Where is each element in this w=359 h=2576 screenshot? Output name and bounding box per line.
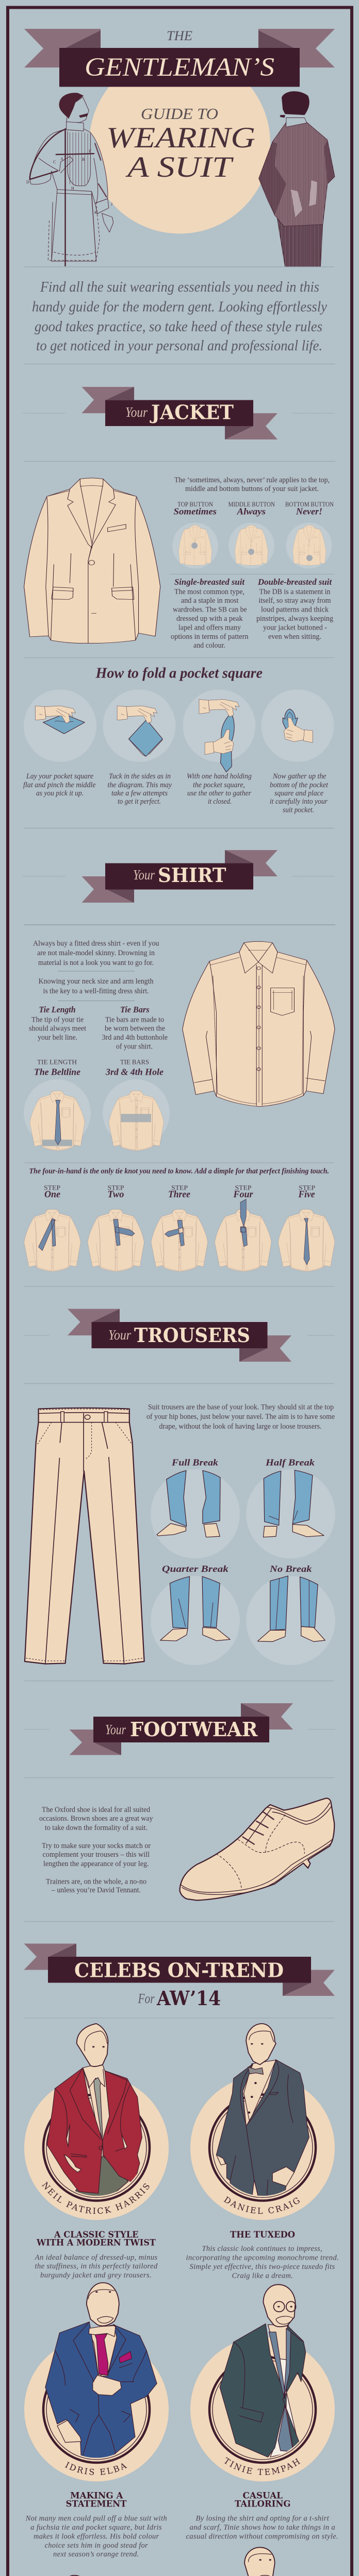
divider: [58, 1001, 135, 1002]
section ribbon: jacket: [23, 387, 334, 439]
button rule labels: Never!: [296, 506, 322, 516]
section ribbon: jacket: Your: [125, 404, 148, 420]
jacket illustration: [24, 478, 160, 643]
footwear text: [39, 1806, 153, 1894]
divider: [24, 1383, 334, 1384]
section ribbon: celebs: [24, 1943, 335, 1996]
celeb text: tuxedo: THE TUXEDO: [230, 2230, 295, 2240]
divider: [24, 827, 334, 828]
shirt intro text: are not male-model skinny. Drowning in: [37, 949, 155, 957]
celeb text: making a statement: makes it look effortless. His bold colour: [34, 2533, 159, 2541]
engraving: man from behind: [259, 91, 335, 267]
shirt intro text: [33, 940, 159, 967]
single-breasted text: The most common type,: [174, 588, 244, 596]
celeb text: casual tailoring: casual direction without compromising on style.: [186, 2533, 338, 2541]
break: half: Half Break: [265, 1457, 315, 1467]
tie step 4: [215, 1184, 271, 1272]
pocket square step 3: [183, 689, 256, 772]
jacket intro text: The ‘sometimes, always, never’ rule applies to the top,: [174, 476, 330, 484]
tie length text: [29, 1005, 86, 1042]
celeb: ryan gosling: [69, 2575, 80, 2576]
celeb text: making a statement: choice sets him in good stead for: [44, 2541, 148, 2550]
celeb: neil patrick harris: NEIL PATRICK HARRIS: [42, 2181, 150, 2214]
tie step 2: STEP: [107, 1184, 124, 1191]
intro text: [32, 279, 327, 354]
divider: [24, 461, 335, 462]
celeb text: making a statement: MAKING A: [70, 2490, 123, 2501]
title: wearing: WEARING: [106, 122, 255, 154]
footwear text: occasions. Brown shoes are a great way: [39, 1815, 153, 1823]
tie step 3: [151, 1184, 208, 1272]
hero circle: [89, 53, 270, 234]
celeb text: casual tailoring: [186, 2490, 338, 2541]
celeb: tinie tempah: TINIE TEMPAH: [224, 2457, 300, 2475]
pocket square captions: it closed.: [208, 798, 232, 806]
celeb: chris pine: [244, 2547, 275, 2576]
break: full: Full Break: [171, 1457, 218, 1467]
engraving labels: A: [60, 157, 63, 161]
double-breasted text: loud patterns and thick: [261, 606, 329, 614]
section ribbon: footwear: Your: [105, 1722, 126, 1737]
section ribbon: footwear: FOOTWEAR: [130, 1718, 258, 1741]
shirt illustration: [183, 941, 335, 1107]
pocket square captions: flat and pinch the middle: [23, 781, 96, 789]
pocket square captions: as you pick it up.: [36, 789, 84, 798]
button rule labels: Sometimes: [173, 506, 217, 516]
trousers text: drape, without the look of having large or loose trousers.: [159, 1422, 322, 1431]
button rule labels: MIDDLE BUTTON: [228, 500, 275, 508]
button rule labels: Always: [236, 506, 266, 516]
tie step 5: Five: [298, 1189, 315, 1200]
single-breasted text: dressed up with a peak: [176, 615, 243, 623]
title: gentleman's: GENTLEMAN’S: [85, 53, 274, 82]
tie bars diagram: [103, 1079, 170, 1150]
break: quarter: Quarter Break: [162, 1564, 229, 1574]
engraving labels: D: [26, 180, 29, 184]
double-breasted text: itself, so stray away from: [259, 597, 331, 605]
celeb: daniel craig: [190, 2023, 335, 2220]
pocket square captions: Now gather up the: [272, 772, 327, 781]
pocket square heading: How to fold a pocket square: [95, 665, 263, 681]
divider: [24, 924, 335, 925]
footwear text: lengthen the appearance of your leg.: [43, 1860, 149, 1868]
section ribbon: shirt: Your: [133, 867, 155, 883]
engraving labels: H: [71, 186, 74, 191]
shirt intro text: Always buy a fitted dress shirt - even if you: [33, 940, 159, 948]
divider: [24, 2018, 334, 2019]
pocket square captions: With one hand holding: [187, 772, 252, 781]
pocket square captions: [23, 772, 329, 814]
engraving labels: J: [111, 202, 112, 207]
section ribbon: trousers: [24, 1309, 335, 1362]
engraving labels: F: [89, 149, 91, 154]
break: none: [246, 1564, 335, 1665]
celeb text: classic style: [35, 2230, 158, 2279]
button rule labels: TOP BUTTON: [177, 500, 214, 508]
double-breasted text: [256, 577, 333, 641]
celeb: idris elba: IDRIS ELBA: [65, 2462, 127, 2475]
double-breasted text: even when sitting.: [268, 633, 321, 641]
intro text: Find all the suit wearing essentials you need in this: [40, 279, 319, 295]
section ribbon: trousers: TROUSERS: [134, 1324, 250, 1347]
title: a suit: A SUIT: [125, 151, 234, 183]
break: full: [151, 1457, 240, 1558]
divider: [24, 364, 335, 365]
tie rule labels: The Beltline: [34, 1066, 80, 1077]
celeb text: classic style: A CLASSIC STYLE: [54, 2230, 139, 2240]
divider: [24, 1681, 334, 1682]
double-breasted text: The DB is a statement in: [259, 588, 331, 596]
jacket intro text: [174, 476, 330, 493]
tie bars text: [102, 1005, 168, 1051]
tie step 1: STEP: [44, 1184, 60, 1191]
break: none: No Break: [269, 1564, 312, 1574]
jacket intro text: middle and bottom buttons of your suit jacket.: [185, 485, 319, 493]
footwear text: The Oxford shoe is ideal for all suited: [42, 1806, 151, 1814]
single-breasted text: options in terms of pattern: [171, 633, 249, 641]
tie rule labels: 3rd & 4th Hole: [105, 1066, 164, 1077]
section ribbon: shirt: SHIRT: [158, 863, 226, 887]
section ribbon: jacket: JACKET: [150, 401, 234, 423]
celeb text: making a statement: next season’s orange trend.: [53, 2550, 139, 2558]
tie length text: Tie Length: [39, 1005, 75, 1014]
celeb: tinie tempah: [190, 2284, 335, 2481]
pocket square captions: Tuck in the sides as in: [109, 772, 171, 781]
neck size text: Knowing your neck size and arm length: [38, 977, 154, 986]
engraving labels: [26, 149, 112, 215]
celeb text: classic style: WITH A MODERN TWIST: [36, 2238, 156, 2248]
shirt intro text: material is not a look you want to go for.: [38, 959, 154, 967]
celeb text: classic style: burgundy jacket and grey trousers.: [40, 2271, 152, 2279]
celeb text: casual tailoring: TAILORING: [235, 2499, 291, 2509]
celeb text: casual tailoring: CASUAL: [242, 2490, 283, 2501]
footwear text: to take down the formality of a suit.: [45, 1824, 148, 1832]
pocket square step 4: [261, 689, 334, 762]
pocket square captions: the pocket square,: [193, 781, 245, 789]
footwear text: complement your trousers – this will: [42, 1851, 150, 1859]
break: quarter: [151, 1564, 240, 1665]
tie step 2: [88, 1184, 144, 1272]
season subheading: For: [138, 1991, 155, 2006]
single-breasted text: [171, 577, 249, 650]
section ribbon: trousers: Your: [108, 1327, 131, 1343]
celeb text: tuxedo: incorporating the upcoming monochrome trend.: [186, 2253, 339, 2262]
engraving: measuring man: [30, 93, 113, 266]
divider: [24, 1162, 334, 1163]
celeb text: casual tailoring: By losing the shirt and opting for a t-shirt: [196, 2514, 330, 2522]
engraving labels: B: [82, 157, 85, 162]
footwear text: Try to make sure your socks match or: [42, 1842, 151, 1850]
double-breasted text: your jacket buttoned -: [263, 623, 327, 632]
tie step 5: STEP: [299, 1184, 315, 1191]
celeb: idris elba: [24, 2282, 169, 2481]
tie bars text: be worn between the: [105, 1024, 165, 1032]
divider: [24, 657, 334, 658]
divider: [169, 574, 334, 575]
celeb text: making a statement: a fuchsia tie and pocket square, but Idris: [30, 2523, 162, 2532]
pocket square captions: use the other to gather: [187, 789, 251, 798]
button rule labels: BOTTOM BUTTON: [285, 500, 334, 508]
pocket square captions: it carefully into your: [270, 798, 328, 806]
tie step 1: [24, 1184, 80, 1272]
divider: [24, 1777, 334, 1778]
intro text: handy guide for the modern gent. Looking effortlessly: [32, 299, 327, 315]
section ribbon: celebs: CELEBS ON-TREND: [74, 1959, 284, 1981]
tie step 5: [278, 1184, 335, 1272]
double-breasted text: Double-breasted suit: [257, 577, 332, 587]
intro text: to get noticed in your personal and professional life.: [36, 337, 322, 354]
celeb text: tuxedo: Craig like a dream.: [232, 2272, 293, 2280]
title ribbon: [24, 29, 335, 87]
pocket square step 1: [24, 689, 96, 762]
tie bars text: 3rd and 4th buttonhole: [102, 1033, 168, 1042]
divider: [24, 1921, 334, 1922]
single-breasted text: Single-breasted suit: [174, 577, 245, 587]
tie step 4: STEP: [235, 1184, 252, 1191]
celeb: neil patrick harris: [24, 2023, 169, 2220]
break: half: [246, 1457, 335, 1558]
single-breasted text: and colour.: [193, 641, 225, 650]
celeb text: tuxedo: [186, 2230, 339, 2280]
tie rule labels: TIE BARS: [120, 1058, 149, 1065]
neck size text: is the key to a well-fitting dress shirt.: [43, 987, 149, 995]
title: the: THE: [167, 28, 192, 43]
footwear text: – unless you’re David Tennant.: [51, 1886, 141, 1894]
celeb text: tuxedo: Simple yet effective, this two-piece tuxedo fits: [190, 2263, 335, 2271]
pocket square captions: the diagram. This may: [107, 781, 172, 789]
celeb: daniel craig: DANIEL CRAIG: [224, 2196, 300, 2214]
hero header: [24, 28, 335, 267]
tie rule labels: TIE LENGTH: [37, 1058, 77, 1065]
pocket square captions: square and place: [274, 789, 324, 798]
tie bars text: Tie bars are made to: [105, 1016, 164, 1024]
single-breasted text: lapel and offers many: [178, 623, 241, 632]
celeb text: classic style: the stuffiness, in this perfectly tailored: [35, 2262, 158, 2270]
tie knot intro: The four-in-hand is the only tie knot you need to know. Add a dimple for that perfect finishing touch.: [29, 1167, 329, 1176]
celeb text: classic style: An ideal balance of dressed-up, minus: [35, 2253, 157, 2262]
engraving labels: K: [94, 210, 97, 215]
pocket square step 2: [103, 689, 175, 762]
season subheading: AW’14: [156, 1987, 221, 2010]
trousers illustration: [25, 1408, 144, 1664]
celeb text: casual tailoring: and scarf, Tinie shows how to take things in a: [190, 2523, 335, 2532]
celeb text: making a statement: [25, 2490, 167, 2558]
single-breasted text: and a staple in most: [181, 597, 238, 605]
tie rule labels: [34, 1058, 164, 1077]
section ribbon: shirt: [23, 850, 334, 903]
intro text: good takes practice, so take heed of these style rules: [35, 318, 322, 335]
single-breasted text: wardrobes. The SB can be: [173, 606, 247, 614]
tie step 1: One: [44, 1189, 61, 1200]
tie length text: your belt line.: [38, 1033, 77, 1042]
tie length text: The tip of your tie: [31, 1016, 84, 1024]
button rule labels: [173, 500, 334, 516]
tie step 4: Four: [233, 1189, 253, 1200]
tie step 2: Two: [107, 1189, 124, 1200]
trousers text: Suit trousers are the base of your look. They should sit at the top: [148, 1403, 334, 1412]
double-breasted text: pinstripes, always keeping: [256, 615, 333, 623]
celeb text: making a statement: STATEMENT: [66, 2499, 127, 2509]
celeb text: tuxedo: This classic look continues to impress,: [202, 2245, 322, 2253]
trousers text: [146, 1403, 335, 1431]
section ribbon: footwear: [24, 1703, 335, 1755]
divider: [58, 971, 135, 972]
neck size text: [38, 977, 154, 995]
trousers text: of your hip bones, just below your navel. The aim is to have some: [146, 1413, 335, 1421]
title: guide to: GUIDE TO: [141, 105, 218, 123]
divider: [24, 1286, 334, 1287]
footwear text: Trainers are, on the whole, a no-no: [46, 1877, 146, 1886]
tie bars text: of your shirt.: [116, 1043, 153, 1051]
button circles with small jackets: [172, 522, 332, 569]
shoe illustration: [180, 1798, 334, 1901]
celeb text: making a statement: Not many men could pull off a blue suit with: [25, 2514, 167, 2522]
tie bars text: Tie Bars: [120, 1005, 150, 1014]
tie step 3: STEP: [171, 1184, 188, 1191]
pocket square captions: suit pocket.: [283, 806, 314, 814]
tie length diagram: [24, 1079, 91, 1150]
engraving labels: C: [53, 160, 56, 164]
pocket square captions: take a few attempts: [111, 789, 168, 798]
pocket square captions: to get it perfect.: [118, 798, 161, 806]
tie step 3: Three: [168, 1189, 191, 1200]
pocket square captions: Lay your pocket square: [26, 772, 94, 781]
divider: [24, 266, 334, 267]
pocket square captions: bottom of the pocket: [270, 781, 329, 789]
tie length text: should always meet: [29, 1024, 86, 1032]
